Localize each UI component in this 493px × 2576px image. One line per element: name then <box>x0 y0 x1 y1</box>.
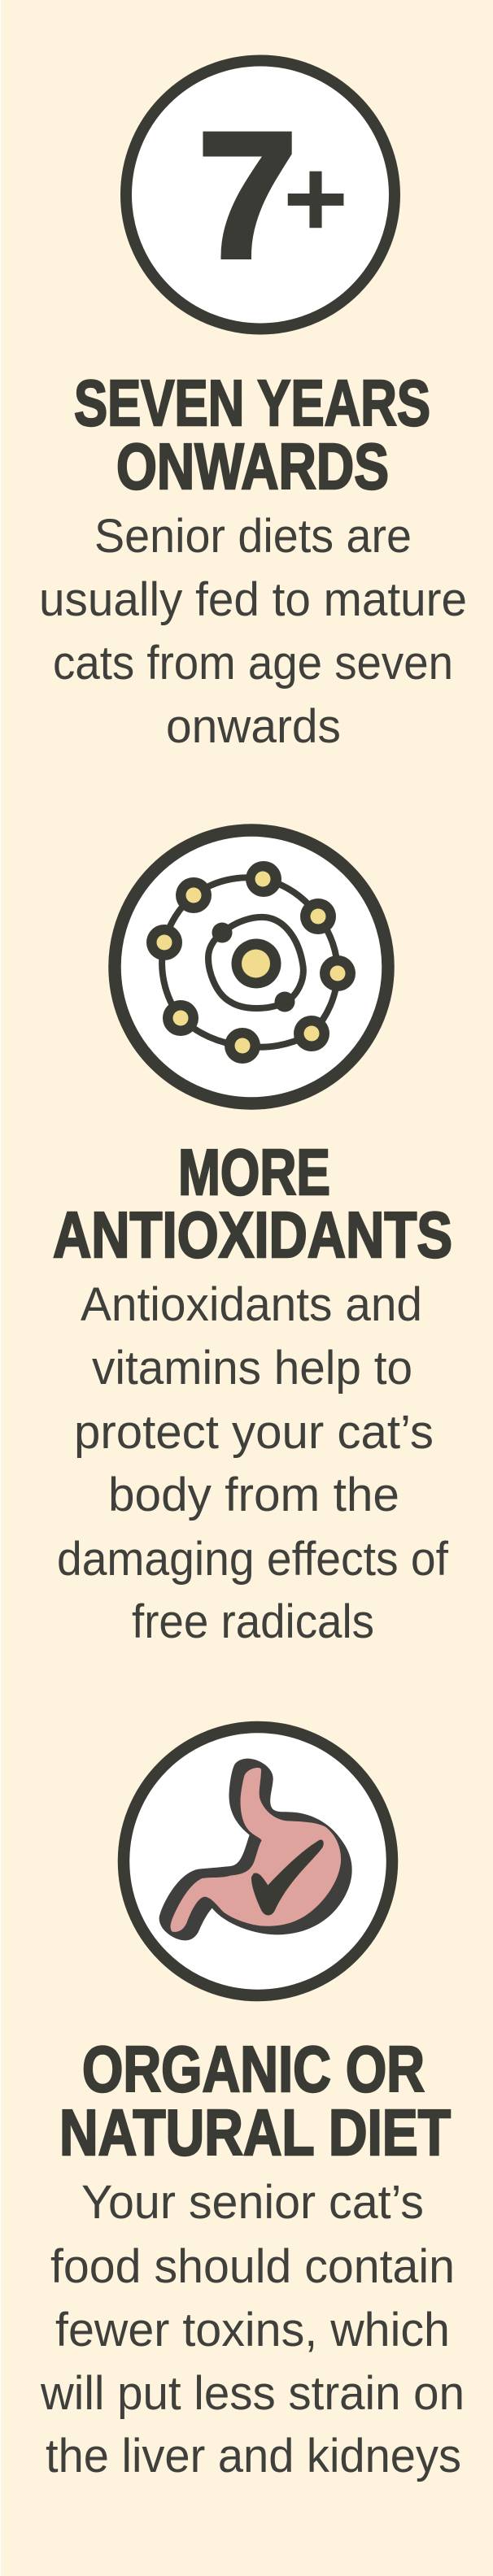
heading: more antioxidants <box>53 1136 452 1271</box>
text: antioxidants description: vitamins help to <box>92 1342 412 1395</box>
text: organic diet description <box>40 2176 465 2482</box>
icon: stomach with check mark <box>124 1727 392 1995</box>
text: senior diets description: cats from age seven <box>53 637 453 690</box>
text: organic diet description: Your senior cat’s <box>81 2176 424 2229</box>
icon: atom with electrons <box>115 830 388 1103</box>
heading: organic or natural diet <box>59 2033 451 2169</box>
icon: 7+ badge <box>126 60 395 329</box>
text: antioxidants description: body from the <box>108 1469 399 1521</box>
heading: seven years onwards <box>74 367 430 503</box>
text: organic diet description: will put less strain on <box>40 2367 465 2420</box>
text: organic diet description: food should contain <box>50 2240 455 2293</box>
text: antioxidants description: Antioxidants and <box>81 1278 422 1331</box>
panel: more antioxidants <box>53 830 452 1648</box>
icon: 7+ badge: + <box>283 137 348 261</box>
text: antioxidants description <box>57 1278 449 1648</box>
text: antioxidants description: free radicals <box>132 1595 374 1648</box>
text: senior diets description: onwards <box>166 700 341 753</box>
text: senior diets description: Senior diets are <box>94 510 412 563</box>
heading: seven years onwards: ONWARDS <box>116 430 389 503</box>
panel: seven years onwards <box>39 60 467 753</box>
heading: organic or natural diet: ORGANIC OR <box>82 2033 425 2105</box>
text: organic diet description: the liver and kidneys <box>46 2430 461 2482</box>
icon: 7+ badge: 7 <box>198 95 297 295</box>
heading: more antioxidants: MORE <box>178 1136 330 1208</box>
text: senior diets description: usually fed to mature <box>39 573 467 626</box>
text: organic diet description: fewer toxins, which <box>55 2304 450 2356</box>
text: senior diets description <box>39 510 467 753</box>
text: antioxidants description: protect your cat’s <box>74 1406 434 1459</box>
text: antioxidants description: damaging effects of <box>57 1533 449 1586</box>
panel: organic or natural diet <box>40 1727 465 2482</box>
